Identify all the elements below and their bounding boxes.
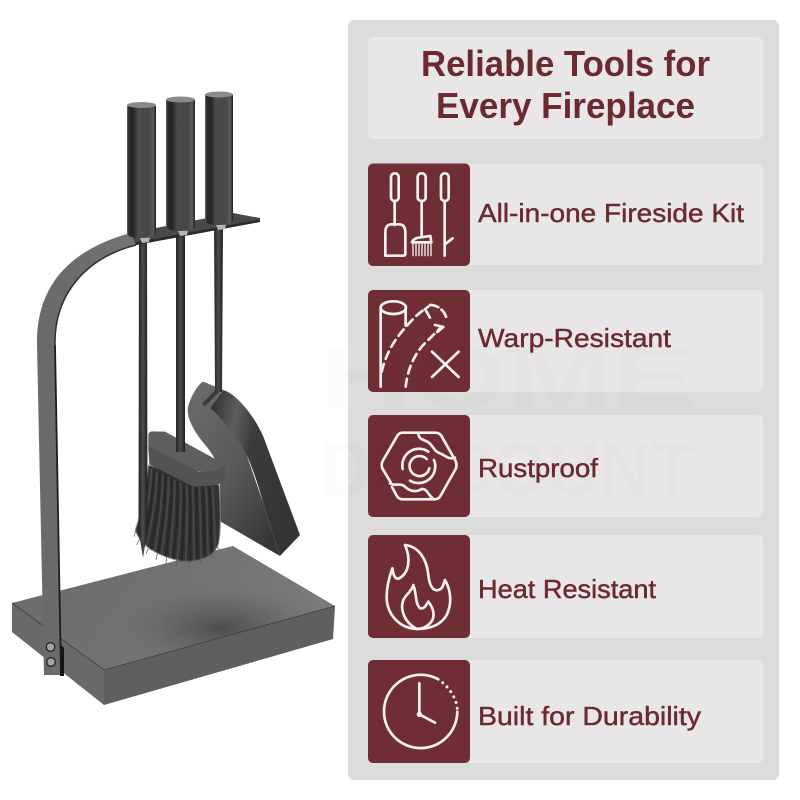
feature row: All-in-one Fireside Kit xyxy=(368,164,763,266)
bristle wisps xyxy=(134,527,220,567)
handle: shovel xyxy=(205,92,233,225)
icon: flame xyxy=(387,545,450,629)
icon: fireplace tools xyxy=(385,173,453,256)
handle: poker xyxy=(127,102,156,238)
background panel xyxy=(348,20,779,780)
connector collars xyxy=(140,224,226,243)
label: Rustproof xyxy=(478,453,599,483)
label: All-in-one Fireside Kit xyxy=(478,198,745,228)
cross bar xyxy=(130,213,260,245)
heading xyxy=(421,43,710,126)
handle: brush xyxy=(166,96,195,231)
feature row: Warp-Resistant xyxy=(368,290,763,392)
icon: warped log xyxy=(381,301,459,387)
poker rod xyxy=(138,238,148,558)
heading: Every Fireplace xyxy=(436,85,695,126)
shovel rod xyxy=(214,224,223,392)
feature row: Heat Resistant xyxy=(368,535,763,638)
bolts xyxy=(46,643,55,666)
brush rod xyxy=(176,230,185,452)
watermark xyxy=(320,328,695,512)
heading panel xyxy=(368,37,763,139)
brush head xyxy=(148,431,225,487)
label: Warp-Resistant xyxy=(478,323,672,353)
stand base xyxy=(12,546,335,705)
icon: rusted hex nut xyxy=(382,433,456,499)
shovel xyxy=(188,382,300,556)
label: Built for Durability xyxy=(478,701,701,731)
curved upright xyxy=(37,233,136,676)
product: fireplace tool set xyxy=(12,92,335,705)
icon: clock xyxy=(384,675,457,748)
label: Heat Resistant xyxy=(478,574,657,604)
feature row: Rustproof xyxy=(368,415,763,517)
brush bristles xyxy=(134,465,220,567)
heading: Reliable Tools for xyxy=(421,43,710,84)
feature row: Built for Durability xyxy=(368,660,763,763)
